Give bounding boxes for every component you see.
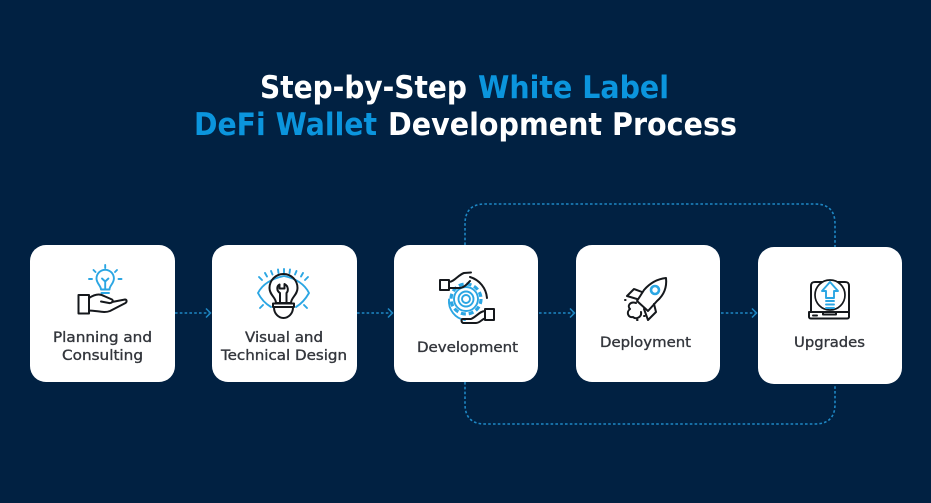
label: Development: Development <box>417 340 519 356</box>
label: Visual and Technical Design <box>220 330 347 364</box>
panel: planning and consulting <box>30 245 175 382</box>
icon: eye with light bulb <box>258 269 309 318</box>
icon: hand with light bulb <box>78 265 127 314</box>
label: Planning and Consulting: Consulting <box>62 348 143 364</box>
icon: rocket <box>625 278 666 320</box>
icon: laptop with up arrow <box>809 280 849 318</box>
panel: upgrades <box>758 247 902 384</box>
label: Visual and Technical Design: Visual and <box>245 330 323 346</box>
dashed loop: top connector from Development to Upgrades <box>465 204 835 247</box>
title: Step-by-Step <box>260 70 467 106</box>
arrow: deployment to upgrades <box>721 308 756 318</box>
arrow: development to deployment <box>539 308 574 318</box>
title: White Label <box>478 70 669 106</box>
arrow: planning to design <box>175 308 210 318</box>
panel: development <box>394 245 538 382</box>
label: Upgrades: Upgrades <box>794 335 865 351</box>
title <box>194 70 737 143</box>
icon: hands with rotating gear <box>440 272 494 323</box>
panel: visual and technical design <box>212 245 357 382</box>
label: Deployment: Deployment <box>600 335 692 351</box>
title: DeFi Wallet <box>194 107 377 143</box>
arrow: design to development <box>357 308 392 318</box>
label: Planning and Consulting <box>53 330 152 364</box>
panel: deployment <box>576 245 720 382</box>
dashed loop: bottom connector from Upgrades to Development <box>465 382 835 424</box>
title: Development Process <box>388 107 737 143</box>
label: Visual and Technical Design: Technical Design <box>220 348 347 364</box>
label: Planning and Consulting: Planning and <box>53 330 152 346</box>
